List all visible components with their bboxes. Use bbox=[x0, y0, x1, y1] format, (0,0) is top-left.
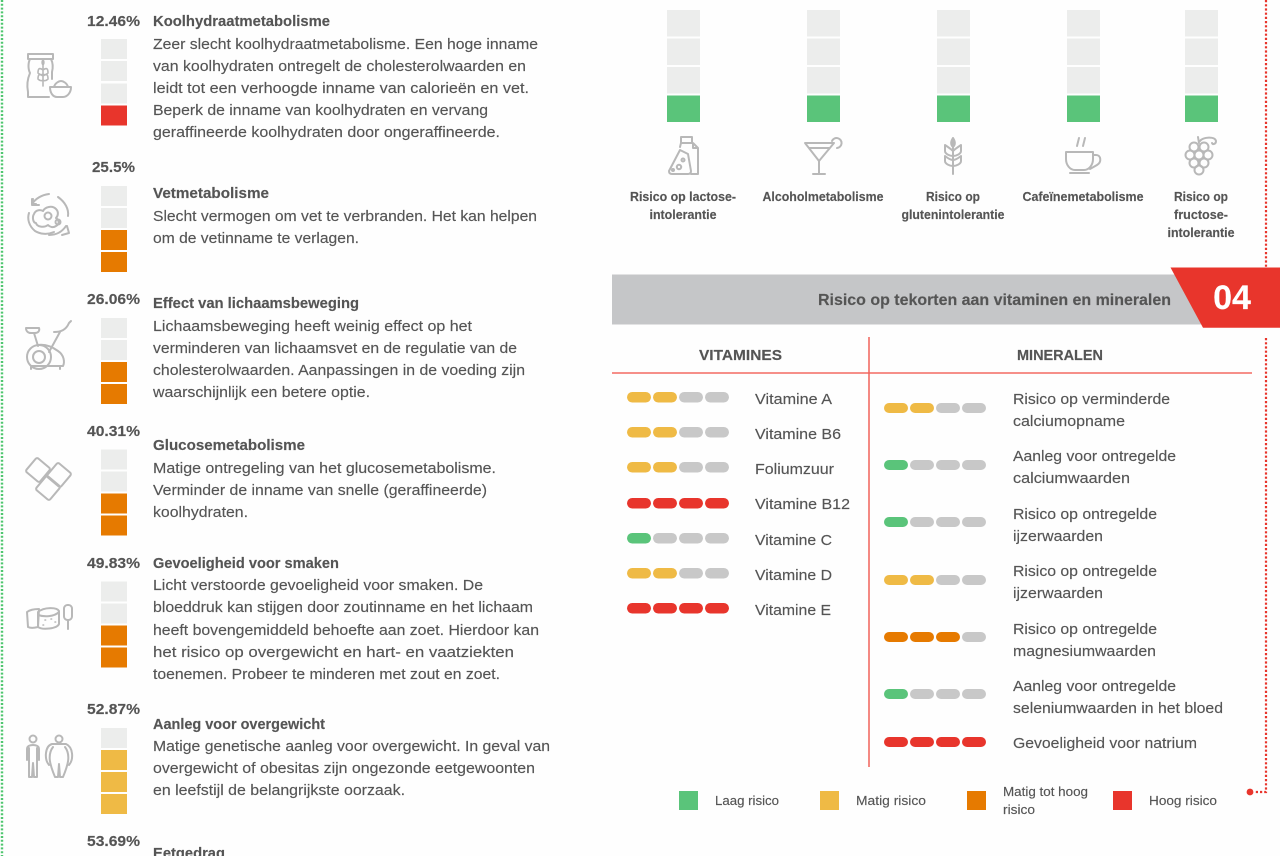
vitamin: foliumzuur bbox=[627, 461, 834, 478]
row: aanleg voor overgewicht bbox=[27, 702, 550, 814]
text block: bloeddruk kan stijgen door zoutinname en het lichaam bbox=[153, 599, 533, 616]
percentage: 49.83%: 49.83% bbox=[87, 556, 140, 572]
text block bbox=[153, 556, 539, 683]
legend item: matig risico bbox=[820, 791, 926, 810]
icon: wheat bbox=[945, 138, 961, 174]
row: koolhydraatmetabolisme bbox=[27, 14, 538, 141]
label: fructose- bbox=[1174, 207, 1228, 222]
column: caffeine bbox=[1022, 10, 1144, 204]
text block: cholesterolwaarden. Aanpassingen in de voeding zijn bbox=[153, 362, 525, 379]
mineral: magnesiumwaarden: Risico op ontregelde bbox=[1013, 621, 1157, 638]
legend item: laag risico: Laag risico bbox=[715, 793, 779, 808]
text block: en leefstijl de belangrijkste oorzaak. bbox=[153, 782, 405, 799]
mineral: magnesiumwaarden: magnesiumwaarden bbox=[1013, 643, 1156, 660]
mineral: ijzerwaarden moderate: Risico op ontregelde bbox=[1013, 563, 1157, 580]
bar: risk level bbox=[1067, 10, 1100, 122]
bar: risk level bbox=[101, 186, 127, 272]
label: Risico op bbox=[926, 189, 980, 204]
text block: heeft bovengemiddeld behoefte aan zoet. Hierdoor kan bbox=[153, 622, 539, 639]
label bbox=[630, 189, 736, 222]
vitamin: A bbox=[627, 391, 832, 408]
mineral: ijzerwaarden moderate: ijzerwaarden bbox=[1013, 585, 1103, 602]
vitamin: B6 bbox=[627, 426, 841, 443]
bar: risk level bbox=[101, 39, 127, 126]
label: Risico op bbox=[1174, 189, 1228, 204]
text block: Verminder de inname van snelle (geraffineerde) bbox=[153, 482, 487, 499]
text block: Beperk de inname van koolhydraten en vervang bbox=[153, 102, 488, 119]
icon: sugar cubes bbox=[25, 457, 72, 501]
vitamin: B12 bbox=[627, 496, 850, 513]
column heading: mineralen: MINERALEN bbox=[1017, 348, 1103, 364]
text block: Licht verstoorde gevoeligheid voor smaken. De bbox=[153, 577, 483, 594]
bar: risk level bbox=[101, 450, 127, 536]
column: fructose bbox=[1168, 10, 1234, 240]
icon: fat cells cycle bbox=[28, 194, 69, 235]
mineral: ijzerwaarden low bbox=[884, 506, 1157, 545]
vitamin: B6: Vitamine B6 bbox=[755, 426, 841, 443]
text block bbox=[153, 186, 537, 247]
bar: risk level bbox=[937, 10, 970, 122]
text block: Aanleg voor overgewicht bbox=[153, 717, 325, 733]
text block: geraffineerde koolhydraten door ongeraffineerde. bbox=[153, 124, 500, 141]
text block: van koolhydraten ontregelt de cholesterolwaarden en bbox=[153, 58, 526, 75]
vitamin: B12: Vitamine B12 bbox=[755, 496, 850, 513]
text block: Vetmetabolisme bbox=[153, 186, 269, 202]
arrow: red dotted connector bbox=[1247, 0, 1266, 795]
mineral: ijzerwaarden low: ijzerwaarden bbox=[1013, 528, 1103, 545]
heading: Risico op tekorten aan vitaminen en mineralen bbox=[818, 292, 1171, 309]
legend item: matig risico: Matig risico bbox=[856, 793, 926, 808]
vitamin: A: Vitamine A bbox=[755, 391, 832, 408]
mineral: ijzerwaarden moderate bbox=[884, 563, 1157, 602]
text block: koolhydraten. bbox=[153, 504, 248, 521]
text block: het risico op overgewicht en hart- en vaatziekten bbox=[153, 644, 514, 661]
mineral: seleniumwaarden: seleniumwaarden in het bloed bbox=[1013, 700, 1223, 717]
mineral: seleniumwaarden bbox=[884, 678, 1223, 717]
icon: grapes bbox=[1186, 137, 1216, 174]
icon: exercise bike bbox=[26, 321, 71, 369]
text block bbox=[153, 717, 550, 799]
text block: Gevoeligheid voor smaken bbox=[153, 556, 339, 572]
bar: risk level bbox=[101, 728, 127, 814]
text block: leidt tot een verhoogde inname van calorieën en vet. bbox=[153, 80, 529, 97]
row: gevoeligheid voor smaken bbox=[27, 556, 539, 683]
bar: risk level bbox=[667, 10, 700, 122]
legend bbox=[679, 784, 1217, 817]
bar: risk level bbox=[1185, 10, 1218, 122]
percentage: 40.31%: 40.31% bbox=[87, 424, 140, 440]
icon: slim and heavy figures bbox=[27, 736, 72, 777]
mineral: magnesiumwaarden bbox=[884, 621, 1157, 660]
percentage: 12.46%: 12.46% bbox=[87, 14, 140, 30]
legend item: matig tot hoog risico: risico bbox=[1003, 802, 1035, 817]
mineral: calciumwaarden: Aanleg voor ontregelde bbox=[1013, 448, 1176, 465]
text block: Zeer slecht koolhydraatmetabolisme. Een hoge inname bbox=[153, 36, 538, 53]
row: vetmetabolisme bbox=[28, 160, 537, 272]
row: glucosemetabolisme bbox=[25, 424, 496, 536]
icon: grain bag and bowl bbox=[27, 54, 71, 97]
mineral: calciumopname: Risico op verminderde bbox=[1013, 391, 1170, 408]
column: alcohol bbox=[762, 10, 884, 204]
column: lactose bbox=[630, 10, 736, 222]
legend item: laag risico bbox=[679, 791, 779, 810]
mineral: seleniumwaarden: Aanleg voor ontregelde bbox=[1013, 678, 1176, 695]
mineral: calciumwaarden bbox=[884, 448, 1176, 487]
vitamin: C: Vitamine C bbox=[755, 532, 832, 549]
vitamin: C bbox=[627, 532, 832, 549]
legend item: matig tot hoog risico: Matig tot hoog bbox=[1003, 784, 1088, 799]
percentage: 53.69%: 53.69% bbox=[87, 834, 140, 850]
icon: cheese and brush bbox=[27, 605, 72, 629]
label: intolerantie bbox=[650, 207, 716, 222]
vitamin: D bbox=[627, 567, 832, 584]
mineral: natrium: Gevoeligheid voor natrium bbox=[1013, 735, 1197, 752]
text block: verminderen van lichaamsvet en de regulatie van de bbox=[153, 340, 517, 357]
panel: metabolism list bbox=[25, 14, 550, 856]
section header: vitamins and minerals bbox=[612, 268, 1280, 328]
icon: coffee cup bbox=[1066, 138, 1100, 173]
bar: risk level bbox=[807, 10, 840, 122]
label: Alcoholmetabolisme bbox=[762, 189, 884, 204]
text block: Lichaamsbeweging heeft weinig effect op het bbox=[153, 318, 473, 335]
row: eetgedrag bbox=[87, 834, 225, 856]
icon: milk and cheese bbox=[669, 137, 698, 174]
bar: risk level bbox=[101, 582, 127, 668]
mineral: natrium bbox=[884, 735, 1197, 752]
text block: om de vetinname te verlagen. bbox=[153, 230, 359, 247]
vitamin: E bbox=[627, 602, 831, 619]
text block: waarschijnlijk een betere optie. bbox=[152, 384, 370, 401]
text block: Glucosemetabolisme bbox=[153, 438, 305, 454]
text block: toenemen. Probeer te minderen met zout en zoet. bbox=[153, 666, 500, 683]
percentage: 25.5%: 25.5% bbox=[92, 160, 135, 176]
percentage: 52.87%: 52.87% bbox=[87, 702, 140, 718]
label: Cafeïnemetabolisme bbox=[1022, 189, 1144, 204]
icon: cocktail glass bbox=[805, 138, 842, 174]
text block: Koolhydraatmetabolisme bbox=[153, 14, 330, 30]
label: glutenintolerantie bbox=[902, 207, 1004, 222]
text block: Matige ontregeling van het glucosemetabolisme. bbox=[153, 460, 496, 477]
vitamin: foliumzuur: Foliumzuur bbox=[755, 461, 834, 478]
mineral: calciumopname: calciumopname bbox=[1013, 413, 1125, 430]
row: lichaamsbeweging bbox=[26, 292, 525, 404]
column heading: vitamines: VITAMINES bbox=[699, 348, 782, 364]
mineral: calciumwaarden: calciumwaarden bbox=[1013, 470, 1130, 487]
text block: overgewicht of obesitas zijn ongezonde eetgewoonten bbox=[153, 760, 535, 777]
percentage: 26.06%: 26.06% bbox=[87, 292, 140, 308]
label: Risico op lactose- bbox=[630, 189, 736, 204]
mineral: calciumopname bbox=[884, 391, 1170, 430]
legend item: matig tot hoog risico bbox=[967, 784, 1088, 817]
text block bbox=[153, 438, 496, 521]
panel: deficiency table bbox=[612, 337, 1252, 767]
legend item: hoog risico bbox=[1113, 791, 1217, 810]
legend item: hoog risico: Hoog risico bbox=[1149, 793, 1217, 808]
text block: Effect van lichaamsbeweging bbox=[153, 296, 359, 312]
label: intolerantie bbox=[1168, 225, 1234, 240]
mineral: ijzerwaarden low: Risico op ontregelde bbox=[1013, 506, 1157, 523]
text block bbox=[153, 14, 538, 141]
section number: 04 bbox=[1213, 279, 1251, 317]
label bbox=[1168, 189, 1234, 240]
column: gluten bbox=[902, 10, 1004, 222]
panel: low risk intolerances bbox=[630, 10, 1234, 240]
vitamin: D: Vitamine D bbox=[755, 567, 832, 584]
vitamin: E: Vitamine E bbox=[755, 602, 831, 619]
text block bbox=[152, 296, 525, 401]
text block: Slecht vermogen om vet te verbranden. Het kan helpen bbox=[153, 208, 537, 225]
bar: risk level bbox=[101, 318, 127, 404]
label bbox=[902, 189, 1004, 222]
text block: Matige genetische aanleg voor overgewicht. In geval van bbox=[153, 738, 550, 755]
